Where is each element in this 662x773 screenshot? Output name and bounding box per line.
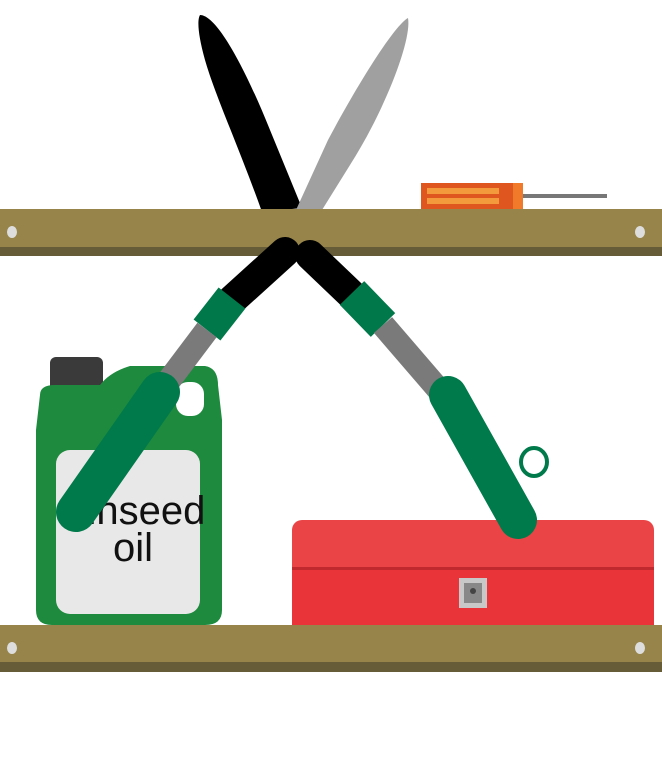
shears handles	[76, 252, 547, 520]
jug: linseed oil: linseed	[79, 489, 205, 533]
bottom shelf	[0, 625, 662, 672]
jug: linseed oil: oil	[113, 526, 153, 570]
toolbox	[292, 520, 654, 628]
screwdriver	[421, 183, 607, 209]
shears blades	[198, 15, 408, 212]
jug: linseed oil	[36, 357, 222, 625]
top shelf	[0, 209, 662, 256]
